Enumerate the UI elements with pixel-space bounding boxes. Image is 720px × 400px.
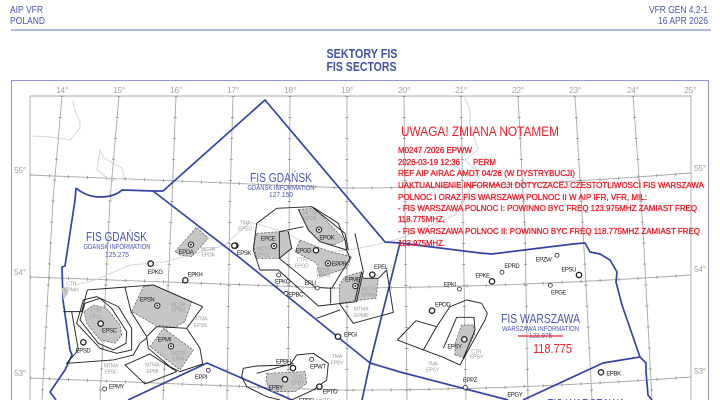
airspace labels center: CTR [297,258,307,264]
airport labels center: EPEL [374,265,389,271]
airport labels west: EPMY [109,384,124,390]
airspace labels west: MCTR [171,351,186,357]
NOTAM text block: REF AIP AIRAC AMDT 04/26 (W DYSTRYBUCJI) [398,168,575,178]
airport labels center: EPPR [332,262,347,268]
airport labels west [76,250,208,390]
airports west [148,261,153,266]
airspace labels east [426,349,484,373]
airport labels west: EPMI [158,338,171,344]
airspace labels center: EPOK [303,216,318,222]
degree labels: 54° [694,264,706,274]
NOTAM text block: PERM [473,157,496,167]
label: FIS Gdansk west: GDANSK INFORMATION [84,242,150,251]
map frame [12,80,708,400]
airport labels east: EPSY [447,345,462,351]
airspace labels center: EPBY [330,360,344,366]
airport labels center: EPTO [323,389,338,395]
degree labels: 53° [694,366,706,376]
airspace labels west: EPSC [89,314,103,320]
coastline and borders [30,96,480,285]
airport labels west: EPDA [179,250,194,256]
center airspace shapes [232,207,393,400]
airport labels west: EPPI [195,375,208,381]
airport labels center: EPSK [237,251,251,257]
airport labels east: EPZW [536,258,552,264]
degree labels: 54° [14,267,26,277]
degree labels: 22° [512,85,524,95]
airspace labels east: EPSY [470,355,484,361]
airspace: EPMH CTR [62,287,68,300]
airspace: MCTR EPDA [175,227,208,257]
airspace labels center [238,210,376,400]
airport labels east [435,258,621,398]
airport labels west: EPKH [188,272,202,278]
label: FIS Warszawa: 123.975 [529,331,552,340]
degree labels: 25° [684,85,696,95]
airspace labels center: MCTR [316,269,331,275]
airspace: CTR EPSC [84,305,122,343]
strike-through on old frequency [518,335,563,337]
airport labels west: EPSC [102,329,118,335]
label: FIS Warszawa: WARSZAWA INFORMATION [502,324,579,333]
NOTAM text block [398,145,704,248]
airspace labels center: EPGD [238,226,252,232]
degree labels: 55° [14,165,26,175]
airport labels center: EPBC [288,292,304,298]
title [326,47,398,74]
airport labels center [237,235,389,400]
new frequency: 118.775 [533,341,572,356]
airspace labels west: EPDA [201,253,215,259]
airspace labels center: TMA [332,354,343,360]
airspace labels east: EPSY [426,367,440,373]
airspace: EPGD CTR [295,240,352,277]
airspace labels center: EPGD [295,263,309,269]
airport labels east: EPKI [444,283,456,289]
airports east [555,253,559,257]
airspace labels center: CTR [293,375,303,381]
airspace labels center: EPPR [317,274,330,280]
airport labels center: EPBY [268,385,283,391]
airport labels east: EPPZ [463,378,478,384]
airspace labels center: MCTR [257,247,271,253]
map graticule [30,96,691,400]
NOTAM text block: 118.775MHZ, [398,214,445,224]
degree labels [14,85,706,378]
label: FIS Warszawa [501,311,580,340]
header right: VFR GEN 4.2-1 [649,5,708,16]
label: FIS Gdansk north: 127.150 [269,190,293,199]
degree labels: 15° [113,85,125,95]
degree labels: 55° [694,163,706,173]
degree labels: 14° [56,85,68,95]
airspace labels west: CTR [91,309,101,315]
airspace labels center: MTMA [354,307,369,313]
airspace labels west: EPMH [64,287,79,293]
airspace labels west: MTMA [145,363,160,369]
airport labels center: EPBH [276,359,291,365]
degree labels: 17° [227,85,239,95]
degree labels: 23° [569,85,581,95]
Gdansk and Warsaw FIS sector boundaries [50,100,652,400]
airport labels center: EPCE [261,237,276,243]
airspace outlines west [63,285,203,384]
airspace labels west: EPSC [104,369,118,375]
header left [10,5,45,27]
header rule [11,29,711,31]
degree labels: 21° [455,85,467,95]
airport labels center: EPKO [275,279,291,285]
airspace labels west: MCTR [201,247,216,253]
label: FIS Gdansk north: GDANSK INFORMATION [248,183,314,192]
airspace: MCTR EPMI [150,328,193,370]
header left: AIP VFR [10,5,43,16]
airspace labels west: EPMI [146,369,158,375]
airspace outlines east [397,300,487,365]
degree labels: 24° [627,85,639,95]
label: FIS Gdansk west: 125.275 [105,250,129,259]
airspace labels center: TMA [240,220,251,226]
airport labels east: EPOD [435,302,451,308]
airspace labels center: EPBY [291,381,305,387]
airspace labels west [64,247,216,375]
airspace labels center: EPMB [362,292,376,298]
west airspace shapes [62,227,238,391]
airport labels east: EPRD [504,264,520,270]
label: FIS Gdansk west: FIS GDAŃSK [86,229,147,244]
NOTAM heading: UWAGA! ZMIANA NOTAMEM [401,123,559,139]
airport labels east: EPGY [507,392,523,398]
airport labels east: EPKE [475,274,490,280]
airspace labels east: TMA [427,361,439,367]
airport labels west: EPSN [140,297,154,303]
airspace labels east: CTR [471,349,482,355]
airport labels west: EPSD [76,348,91,354]
label: FIS Gdansk west [84,229,150,259]
airspace labels center: EPCE [257,252,271,258]
label: FIS Gdansk north [248,170,314,199]
airport labels east: EPBK [606,371,621,377]
airspace labels west: MTMA [104,363,119,369]
header right [649,5,708,27]
airspace: MCTR EPCE [253,232,292,258]
airport labels west: EPKG [148,270,163,276]
airports center [232,243,237,248]
airspace labels center: EPMB [354,313,369,319]
degree labels: 18° [284,85,296,95]
NOTAM text block: - FIS WARSZAWA POLNOC I: POWINNO BYC FREQ 123.975MHZ ZAMIAST FREQ [398,203,697,213]
airspace outlines center [242,207,393,400]
airport labels center: EPOK [319,235,335,241]
degree labels: 19° [341,85,353,95]
airspace: CTR EPSY [455,325,475,357]
label: FIS Gdansk north: FIS GDAŃSK [250,170,312,185]
airspace labels west: EPMI [172,357,184,363]
header left: POLAND [10,16,45,27]
airspace labels west: MTMA [193,317,208,323]
airspace: MCTR EPSN [132,285,192,327]
NOTAM text block: POLNOC I ORAZ FIS WARSZAWA POLNOC II W AIP IFR, VFR, MIL: [398,192,647,202]
airport labels center: EPGI [344,333,357,339]
airspace: EPMB [339,272,378,303]
airport labels center: EPWT [310,364,326,370]
NOTAM text block: - FIS WARSZAWA POLNOC II: POWINNO BYC FREQ 118.775MHZ ZAMIAST FREQ [398,226,700,236]
degree labels: 53° [14,368,26,378]
title: FIS SECTORS [326,60,396,74]
airport labels east: EPSU [561,268,576,274]
east airspace shapes [397,253,621,398]
airspace labels center: MCTR [303,210,318,216]
NOTAM text block: 123.975MHZ. [398,238,445,248]
airspace: EPBY [266,372,307,392]
airspace: MCTR EPOK [298,208,345,245]
label: FIS Warszawa: FIS WARSZAWA [501,311,580,326]
airspace labels west: MCTR [171,303,186,309]
airspace labels center: MCTR [362,287,376,293]
NOTAM text block: 2026-03-19 12:36 [398,157,460,167]
airport labels center: EPMB [345,278,361,284]
NOTAM text block: UAKTUALNIENIE INFORMACJI DOTYCZACEJ CZESTOTLIWOSCI FIS WARSZAWA [398,180,704,190]
degree labels: 20° [398,85,410,95]
title: SEKTORY FIS [326,47,398,61]
airspace labels west: CTR [66,282,77,288]
airport labels east: EPGE [551,290,566,296]
header right: 16 APR 2026 [658,16,708,27]
NOTAM text block: M0247 /2026 EPWW [398,145,472,155]
airspace labels west: EPSN [171,308,185,314]
degree labels: 16° [170,85,182,95]
airspace labels west: EPSN [194,323,207,329]
airport labels center: EPGD [296,248,312,254]
airport labels center: EPLI [304,281,316,287]
